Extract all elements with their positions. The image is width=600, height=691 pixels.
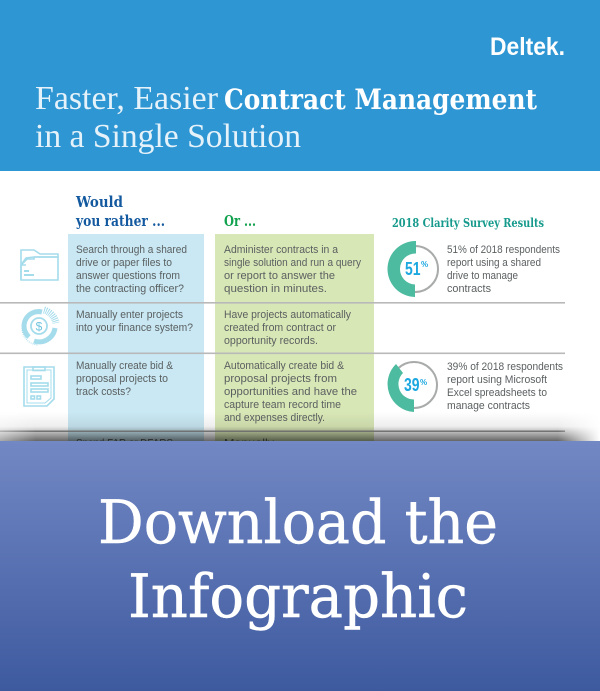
or text: row 2: Have projects automatically <box>224 309 351 321</box>
survey text: 51%: contracts <box>447 283 491 295</box>
donut chart: 51% <box>387 241 438 297</box>
donut chart: 39% <box>388 362 437 412</box>
or text: row 2 <box>224 309 351 347</box>
survey text: 51%: drive to manage <box>447 270 518 282</box>
column heading: survey results: 2018 Clarity Survey Results <box>392 216 544 230</box>
title: in a Single Solution <box>35 118 301 155</box>
call to action text <box>98 488 498 632</box>
title <box>35 80 537 155</box>
would-you-rather text: row 2: into your finance system? <box>76 322 193 334</box>
survey text: 51%: report using a shared <box>447 257 541 269</box>
donut chart: 39%: 39 <box>404 375 420 395</box>
or text: row 2: opportunity records. <box>224 335 318 347</box>
would-you-rather text: row 2 <box>76 309 193 334</box>
or text: row 1: Administer contracts in a <box>224 244 339 256</box>
or text: row 1: single solution and run a query <box>224 257 361 269</box>
call to action text: Infographic <box>128 562 468 632</box>
survey text: 39%: 39% of 2018 respondents <box>447 361 563 373</box>
Deltek logo: Deltek. <box>490 33 565 61</box>
would-you-rather text: row 3: proposal projects to <box>76 373 168 385</box>
or text: row 3: Automatically create bid & <box>224 360 345 372</box>
title: Contract Management <box>224 83 537 116</box>
column: would you rather background <box>68 234 204 441</box>
download panel <box>0 441 600 691</box>
would-you-rather text: row 1 <box>76 244 187 295</box>
cut-off row 4 text <box>76 438 275 450</box>
would-you-rather text: row 1: drive or paper files to <box>76 257 172 269</box>
survey text: 39%: Excel spreadsheets to <box>447 387 547 399</box>
would-you-rather text: row 1: answer questions from <box>76 270 180 282</box>
would-you-rather text: row 3 <box>76 360 174 398</box>
donut chart: 39%: % <box>420 378 427 387</box>
or text: row 3: and expenses directly. <box>224 412 325 424</box>
would-you-rather text: row 3: track costs? <box>76 386 131 398</box>
call to action text: Download the <box>98 488 498 558</box>
donut chart: 51%: % <box>421 260 428 269</box>
column: or background <box>215 234 374 441</box>
survey text: 39% <box>447 361 563 412</box>
column heading: would you rather: Would <box>75 193 123 211</box>
would-you-rather text: row 1: Search through a shared <box>76 244 187 256</box>
icon: dollar cycle: $ <box>36 320 43 334</box>
icon: folder <box>21 250 58 280</box>
column heading: or: Or ... <box>224 212 256 230</box>
column heading: would you rather: you rather ... <box>75 212 165 230</box>
would-you-rather text: row 1: the contracting officer? <box>76 283 184 295</box>
survey text: 39%: manage contracts <box>447 400 530 412</box>
column heading: would you rather <box>75 193 165 230</box>
icon: dollar cycle <box>22 310 56 345</box>
header banner <box>0 0 600 171</box>
survey text: 39%: report using Microsoft <box>447 374 547 386</box>
or text: row 2: created from contract or <box>224 322 336 334</box>
title: Faster, Easier <box>35 80 219 117</box>
or text: row 3: opportunities and have the <box>224 386 357 398</box>
cut-off row 4 text: Spend FAR or DFARS <box>76 438 173 450</box>
would-you-rather text: row 3: Manually create bid & <box>76 360 174 372</box>
survey text: 51%: 51% of 2018 respondents <box>447 244 560 256</box>
or text: row 3: capture team record time <box>224 399 341 411</box>
or text: row 1 <box>224 244 361 295</box>
or text: row 1: or report to answer the <box>224 270 335 282</box>
donut chart: 51%: 51 <box>405 259 420 279</box>
survey text: 51% <box>447 244 560 295</box>
or text: row 3 <box>224 360 357 424</box>
icon: clipboard form <box>24 367 54 406</box>
would-you-rather text: row 2: Manually enter projects <box>76 309 183 321</box>
or text: row 3: proposal projects from <box>224 373 337 385</box>
or text: row 1: question in minutes. <box>224 283 327 295</box>
cut-off row 4 text: Manually <box>224 438 275 450</box>
